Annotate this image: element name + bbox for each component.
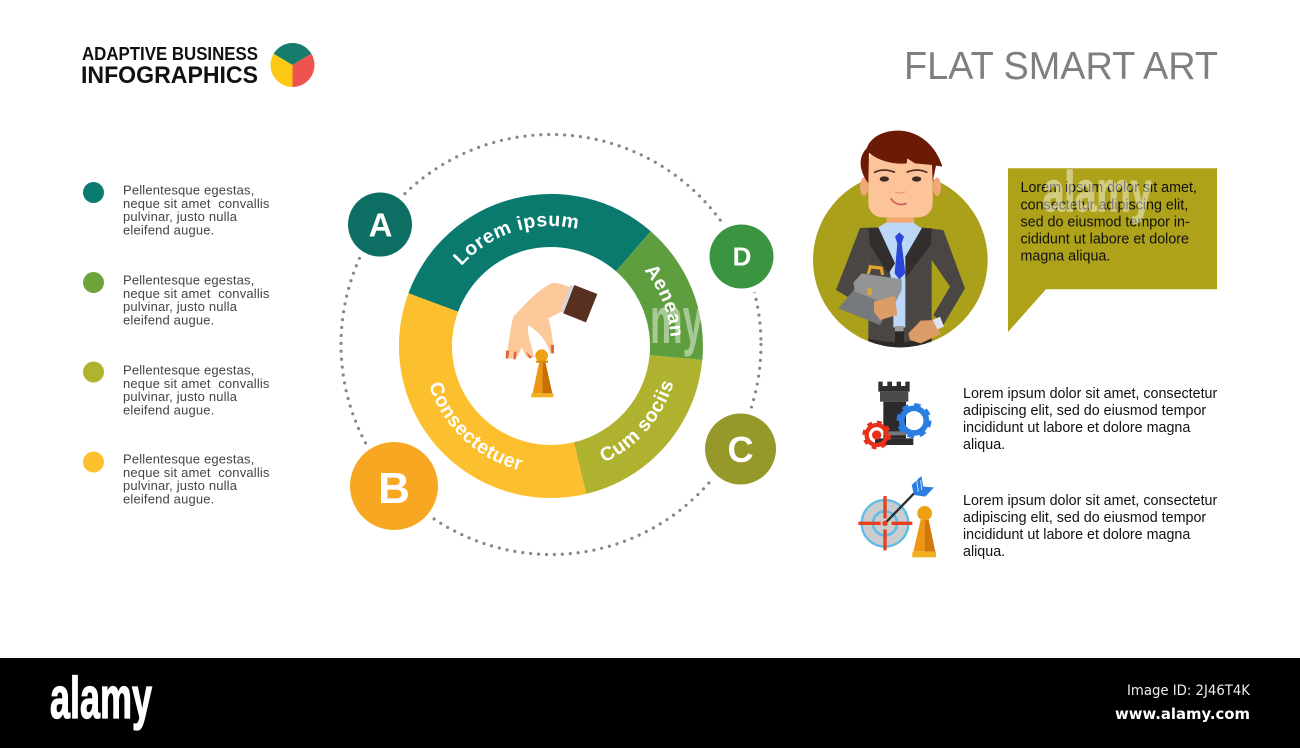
text block 2: incididunt ut labore et dolore magna — [963, 527, 1190, 543]
text block 1: Lorem ipsum dolor sit amet, consectetur — [963, 386, 1218, 402]
hair — [861, 131, 942, 183]
legend item 1: pulvinar, justo nulla — [123, 209, 238, 224]
text block 1 — [963, 386, 1218, 453]
logo heading — [81, 44, 258, 89]
legend item 4: eleifend augue. — [123, 492, 214, 506]
text block 2 — [963, 493, 1218, 560]
footer bar — [0, 658, 1300, 748]
badge A: A — [369, 206, 392, 244]
watermark: ring: my — [650, 283, 703, 357]
label: Aenean: Aenean — [644, 266, 681, 336]
face — [868, 148, 933, 217]
badge B — [344, 436, 444, 536]
legend list — [83, 182, 270, 506]
watermark: callout: alamy — [1043, 160, 1152, 224]
legend item 3: Pellentesque egestas, — [123, 362, 254, 378]
badge C — [698, 407, 782, 491]
badge C: C — [728, 429, 754, 470]
icon: hand placing pawn — [506, 283, 597, 397]
label: Consectetuer: Consectetuer — [430, 382, 523, 470]
speech bubble — [1008, 168, 1217, 332]
icon: target, arrow and pawn — [858, 476, 936, 557]
donut chart — [398, 194, 703, 498]
speech bubble: Lorem ipsum dolor sit amet, — [1020, 180, 1197, 196]
badge B: B — [378, 464, 410, 513]
speech bubble: consectetur adipiscing elit, — [1020, 198, 1188, 214]
speech bubble: sed do eiusmod tempor in- — [1020, 214, 1190, 230]
legend item 4: neque sit amet convallis — [123, 465, 270, 480]
speech bubble: magna aliqua. — [1020, 248, 1110, 264]
legend item 2 — [83, 272, 270, 328]
badge D: D — [733, 242, 751, 272]
person illustration — [813, 131, 988, 350]
legend item 2: eleifend augue. — [123, 312, 214, 328]
eyes and brows — [874, 170, 927, 173]
image id: Image ID: 2J46T4K — [1127, 683, 1251, 699]
legend item 3: pulvinar, justo nulla — [123, 389, 238, 404]
legend item 3: eleifend augue. — [123, 402, 214, 418]
legend item 2: pulvinar, justo nulla — [123, 299, 238, 314]
segment: Aenean — [616, 231, 703, 360]
label: Cum sociis: Cum sociis — [600, 381, 673, 460]
website: www.alamy.com — [1115, 705, 1250, 723]
speech bubble: cididunt ut labore et dolore — [1020, 232, 1189, 248]
title: FLAT SMART ART — [904, 45, 1218, 88]
figure — [836, 210, 965, 350]
legend item 1: neque sit amet convallis — [123, 196, 270, 211]
legend item 4 — [83, 452, 270, 506]
badge A — [342, 186, 418, 262]
legend item 3 — [83, 362, 270, 418]
text block 2: Lorem ipsum dolor sit amet, consectetur — [963, 493, 1218, 509]
logo heading: INFOGRAPHICS — [81, 62, 258, 89]
segment: Consectetuer — [399, 293, 586, 498]
footer logo: alamy — [50, 666, 152, 731]
legend item 4: Pellentesque egestas, — [123, 452, 254, 466]
text block 1: aliqua. — [963, 437, 1005, 453]
dotted orbit — [341, 134, 761, 554]
text block 2: aliqua. — [963, 544, 1005, 560]
logo heading: ADAPTIVE BUSINESS — [82, 44, 258, 64]
legend item 2: neque sit amet convallis — [123, 286, 270, 301]
badge D — [704, 218, 780, 294]
legend item 1 — [83, 182, 270, 238]
text block 2: adipiscing elit, sed do eiusmod tempor — [963, 510, 1206, 526]
segment: Lorem ipsum — [408, 194, 651, 312]
ears — [860, 177, 868, 196]
segment: Cum sociis — [574, 355, 702, 494]
legend item 4: pulvinar, justo nulla — [123, 478, 238, 493]
legend item 1: Pellentesque egestas, — [123, 182, 254, 198]
label: Lorem ipsum: Lorem ipsum — [452, 216, 578, 266]
nose and mouth — [895, 192, 905, 193]
icon: rook and gears — [864, 382, 930, 448]
legend item 1: eleifend augue. — [123, 222, 214, 238]
backdrop circle — [813, 173, 988, 347]
legend item 3: neque sit amet convallis — [123, 376, 270, 391]
legend item 2: Pellentesque egestas, — [123, 272, 254, 288]
text block 1: adipiscing elit, sed do eiusmod tempor — [963, 403, 1206, 419]
icon: logo pie — [271, 43, 314, 87]
text block 1: incididunt ut labore et dolore magna — [963, 420, 1190, 436]
